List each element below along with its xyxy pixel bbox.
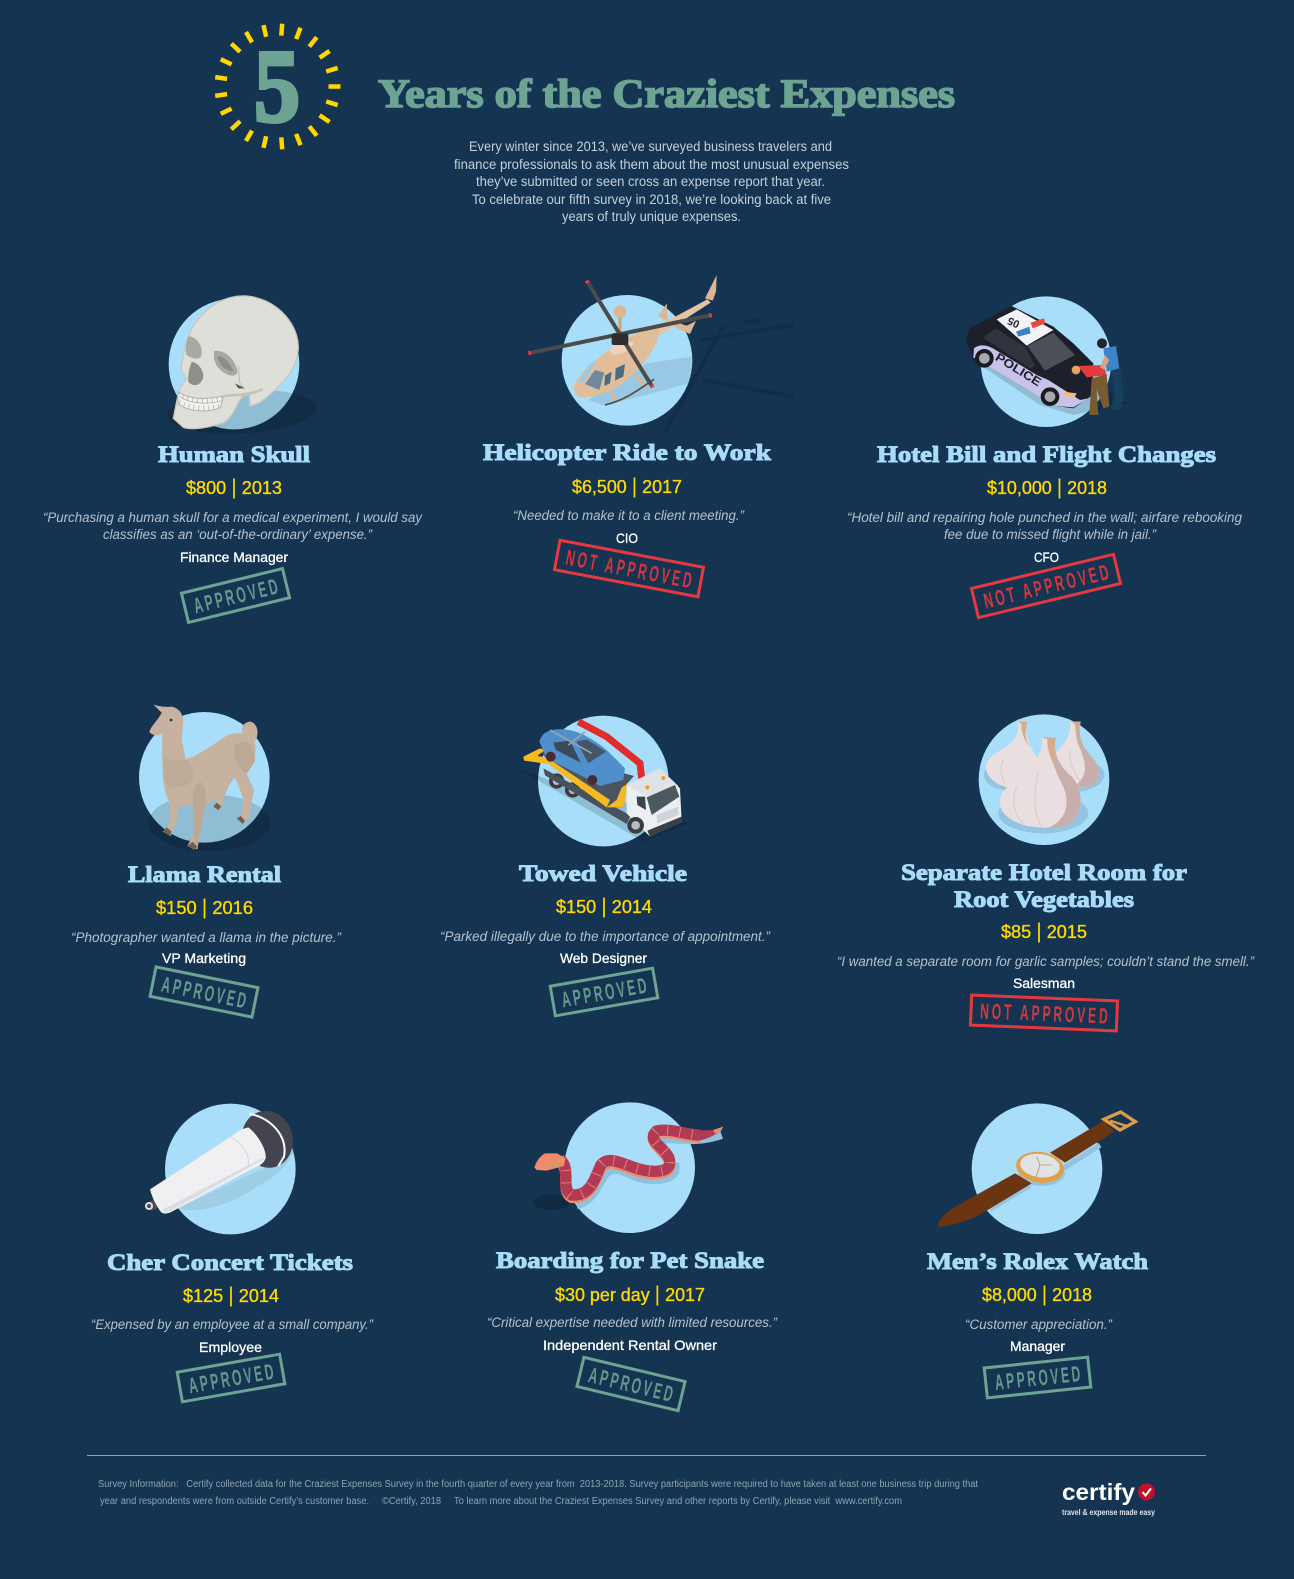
role: VP Marketing — [162, 950, 246, 966]
intro text: To celebrate our fifth survey in 2018, we’re looking back at five — [472, 192, 831, 208]
cost and year: $150 | 2016 — [156, 896, 253, 919]
panel: rolex watch — [927, 1103, 1148, 1398]
illustration: skull — [166, 296, 317, 437]
stamp: approved: APPROVED — [187, 1359, 276, 1398]
stamp: not approved: NOT APPROVED — [564, 545, 694, 593]
role: Finance Manager — [180, 549, 288, 565]
stamp: not approved: NOT APPROVED — [981, 560, 1111, 613]
cost and year: $150 | 2014 — [556, 895, 652, 918]
heading — [901, 860, 1187, 913]
panel: towed vehicle — [440, 716, 771, 1016]
cost and year: $8,000 | 2018 — [982, 1283, 1092, 1306]
certify logo: travel & expense made easy — [1062, 1507, 1155, 1517]
quote: “Critical expertise needed with limited resources.” — [487, 1315, 778, 1331]
panel: root vegetables — [837, 714, 1255, 1031]
quote: fee due to missed flight while in jail.” — [944, 527, 1157, 543]
quote: “Photographer wanted a llama in the picture.” — [71, 930, 342, 946]
header — [215, 24, 955, 225]
role: Manager — [1010, 1338, 1065, 1354]
quote: classifies as an ‘out-of-the-ordinary’ expense.” — [103, 527, 373, 543]
stamp: approved: APPROVED — [159, 972, 249, 1013]
panel: cher concert — [91, 1104, 374, 1402]
survey information text — [98, 1479, 978, 1507]
stamp: approved: APPROVED — [586, 1362, 676, 1407]
stamp: approved: APPROVED — [191, 574, 280, 618]
heading: Towed Vehicle — [519, 861, 687, 887]
role: Web Designer — [560, 950, 647, 966]
stamp: approved: APPROVED — [560, 973, 649, 1012]
stamp: approved — [181, 569, 290, 622]
cost and year: $10,000 | 2018 — [987, 476, 1107, 499]
intro text — [454, 139, 849, 225]
title: Years of the Craziest Expenses — [378, 71, 955, 116]
role: Employee — [199, 1339, 262, 1355]
quote — [43, 510, 423, 543]
cost and year: $85 | 2015 — [1001, 920, 1087, 943]
illustration: tow truck — [517, 716, 688, 846]
panel: pet snake — [487, 1102, 778, 1411]
cost and year: $30 per day | 2017 — [555, 1283, 705, 1306]
survey information text: Survey Information: Certify collected data for the Craziest Expenses Survey in the fourth quarter of every year from 2013-2018. Survey participants were required to have taken at least one business trip during that — [98, 1479, 978, 1490]
panel: hotel bill — [847, 296, 1242, 618]
heading: Root Vegetables — [954, 887, 1134, 913]
stamp: approved — [550, 968, 658, 1016]
quote — [847, 510, 1242, 543]
heading: Llama Rental — [128, 862, 282, 888]
role: CFO — [1034, 549, 1059, 565]
quote: “Hotel bill and repairing hole punched in the wall; airfare rebooking — [847, 510, 1242, 526]
illustration: police car arrest — [965, 296, 1128, 427]
panel: human skull — [43, 296, 423, 622]
stamp: approved — [984, 1357, 1091, 1398]
illustration: police car arrest: 05 — [1006, 314, 1022, 330]
illustration: llama — [139, 705, 270, 851]
illustration: police car arrest: POLICE — [993, 350, 1044, 389]
quote: “Purchasing a human skull for a medical experiment, I would say — [43, 510, 423, 526]
illustration: microphone — [145, 1104, 299, 1234]
stamp: approved: APPROVED — [994, 1361, 1082, 1395]
quote: “I wanted a separate room for garlic samples; couldn’t stand the smell.” — [837, 954, 1255, 970]
heading: Human Skull — [158, 442, 311, 468]
illustration: watch — [938, 1103, 1135, 1234]
intro text: years of truly unique expenses. — [562, 209, 741, 225]
icon: sunburst with number 5: 5 — [254, 29, 300, 144]
role: CIO — [616, 530, 638, 546]
panel: helicopter ride — [483, 275, 793, 597]
footer — [87, 1456, 1206, 1517]
quote: “Needed to make it to a client meeting.” — [513, 508, 745, 524]
survey information text: year and respondents were from outside Certify’s customer base. ©Certify, 2018 To learn more about the Craziest Expenses Survey and other reports by Certify, please visit www.certify.com — [100, 1496, 902, 1507]
illustration: snake — [533, 1102, 723, 1233]
icon: sunburst with number 5 — [215, 24, 340, 149]
quote: “Customer appreciation.” — [965, 1317, 1113, 1333]
role: Independent Rental Owner — [543, 1337, 717, 1353]
stamp: approved — [150, 967, 258, 1017]
cost and year: $6,500 | 2017 — [572, 475, 682, 498]
heading: Cher Concert Tickets — [107, 1250, 353, 1276]
stamp: approved — [177, 1354, 285, 1402]
certify logo — [1062, 1479, 1155, 1517]
certify logo: certify — [1062, 1479, 1135, 1505]
intro text: finance professionals to ask them about the most unusual expenses — [454, 157, 849, 173]
intro text: they’ve submitted or seen cross an expense report that year. — [476, 174, 825, 190]
illustration: helicopter — [528, 275, 793, 432]
intro text: Every winter since 2013, we’ve surveyed business travelers and — [469, 139, 832, 155]
heading: Boarding for Pet Snake — [496, 1248, 764, 1274]
panel: llama rental — [71, 705, 342, 1017]
stamp: not approved: NOT APPROVED — [980, 999, 1108, 1029]
stamp: approved — [577, 1357, 685, 1411]
role: Salesman — [1013, 975, 1075, 991]
cost and year: $800 | 2013 — [186, 476, 282, 499]
heading: Men’s Rolex Watch — [927, 1249, 1148, 1275]
heading: Separate Hotel Room for — [901, 860, 1187, 886]
cost and year: $125 | 2014 — [183, 1284, 279, 1307]
heading: Hotel Bill and Flight Changes — [877, 442, 1216, 468]
quote: “Expensed by an employee at a small company.” — [91, 1317, 374, 1333]
heading: Helicopter Ride to Work — [483, 440, 772, 466]
quote: “Parked illegally due to the importance of appointment.” — [440, 929, 771, 945]
illustration: garlic — [979, 714, 1109, 845]
